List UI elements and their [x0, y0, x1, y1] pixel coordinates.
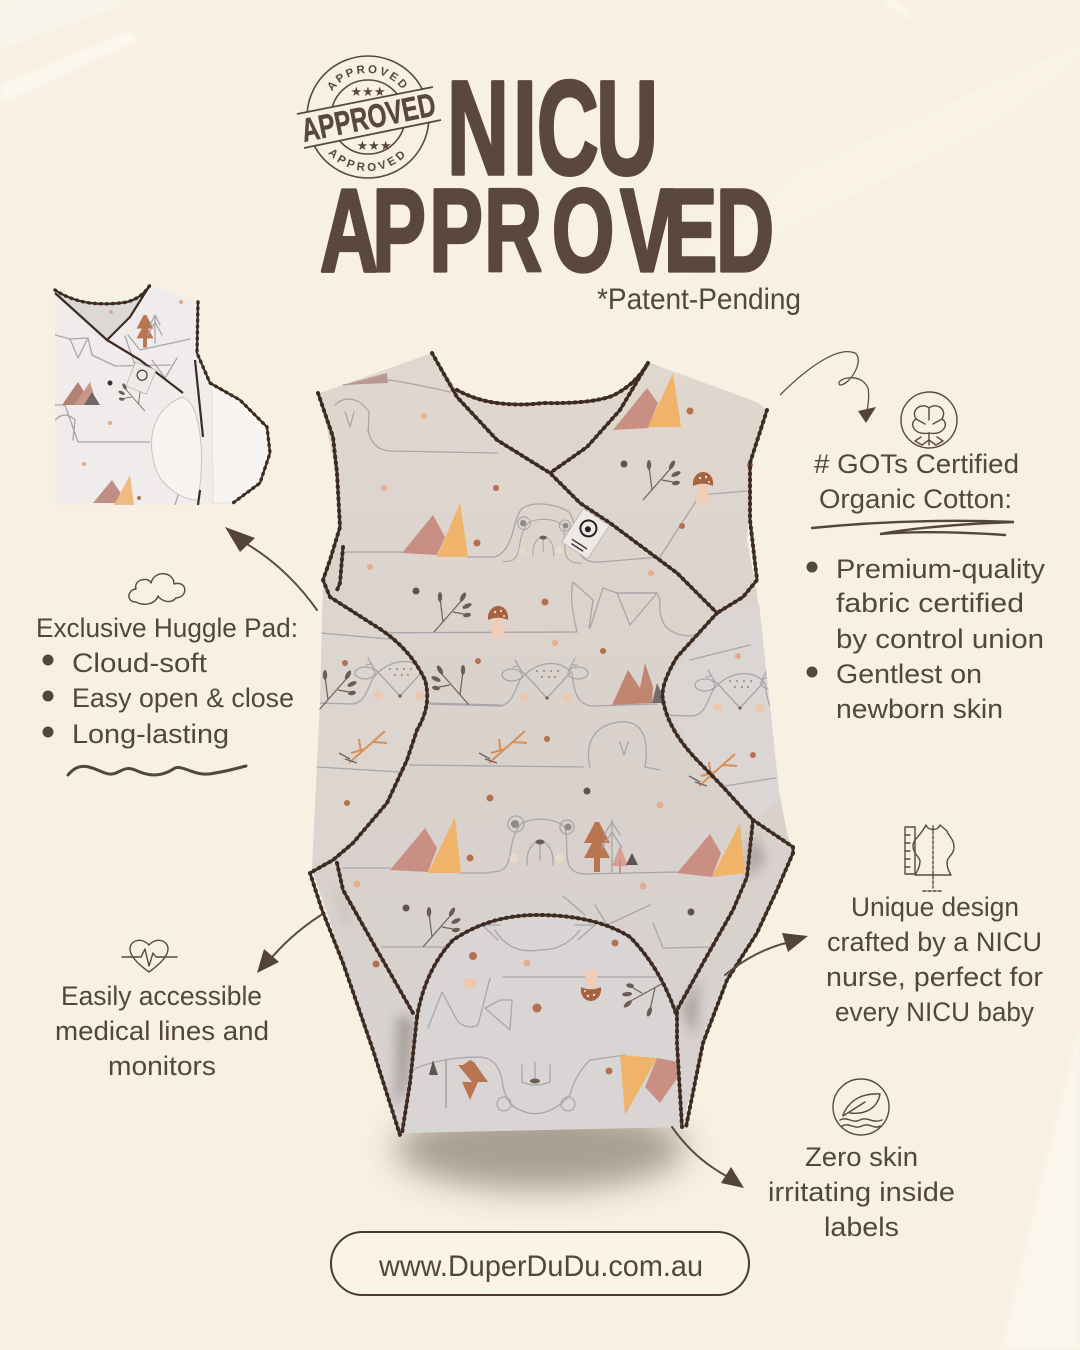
icon: cloud	[129, 574, 185, 604]
list	[806, 554, 1046, 724]
panel: medical lines: medical lines and	[55, 1016, 269, 1046]
unique design body: crafted by a NICU	[827, 927, 1042, 957]
print dots	[342, 408, 753, 1074]
arrow: medical lines	[257, 915, 321, 973]
arrow: curly to cotton	[780, 352, 876, 423]
list	[42, 648, 294, 749]
heading: Exclusive Huggle Pad:	[36, 613, 298, 643]
garment shadow	[395, 1106, 685, 1190]
list: Easy open & close	[72, 683, 294, 713]
list: Gentlest on	[836, 659, 982, 689]
creases	[335, 830, 765, 1110]
panel: zero skin irritating	[768, 1142, 955, 1242]
list: newborn skin	[836, 694, 1003, 724]
squiggle underline	[68, 766, 246, 775]
unique design body: every NICU baby	[835, 997, 1034, 1027]
picot trim	[310, 353, 793, 1135]
approved stamp: ★★★	[357, 139, 391, 154]
approved stamp: APPROVED	[328, 65, 406, 92]
left wing	[314, 632, 425, 834]
unique design body: nurse, perfect for	[826, 962, 1043, 992]
approved stamp	[296, 55, 442, 179]
heading: # GOTs Certified	[814, 449, 1019, 479]
fabric body	[312, 353, 793, 1133]
arrow: inset to garment	[225, 527, 317, 610]
website pill	[331, 1232, 749, 1295]
patent note: *Patent-Pending	[597, 283, 801, 316]
website pill: www.DuperDuDu.com.au	[378, 1250, 703, 1283]
garment: baby wrap	[308, 351, 795, 1137]
approved stamp: APPROVED	[298, 85, 439, 149]
panel: zero skin irritating: irritating inside	[768, 1177, 955, 1207]
panel: medical lines: Easily accessible	[61, 981, 262, 1011]
panel: unique design: Unique design	[851, 892, 1019, 922]
sprigs, trees and mushrooms	[339, 460, 737, 947]
panel: exclusive huggle pad	[36, 613, 298, 775]
panel: medical lines: monitors	[108, 1051, 216, 1081]
panel: GOTS certified	[806, 449, 1046, 724]
panel: medical lines	[55, 981, 269, 1081]
mountains	[343, 373, 745, 877]
panel: zero skin irritating: labels	[824, 1212, 899, 1242]
icon: feather	[833, 1079, 889, 1135]
approved stamp: ★★★	[351, 85, 385, 100]
sewn label	[562, 509, 609, 559]
arrow: labels	[672, 1127, 744, 1188]
panel: GOTS certified: Organic Cotton:	[819, 484, 1012, 514]
title: NICU	[447, 53, 658, 203]
unique design body	[826, 927, 1043, 1027]
list: Premium-quality	[836, 554, 1046, 584]
icon: dress form	[905, 825, 954, 891]
inset: huggle pad close-up	[50, 280, 275, 510]
huggle pad flap	[409, 924, 678, 1133]
icon: heart monitor	[122, 940, 177, 972]
list: Cloud-soft	[72, 648, 208, 678]
center pattern	[323, 380, 747, 948]
icon: cotton	[901, 392, 957, 448]
panel: zero skin irritating: Zero skin	[805, 1142, 918, 1172]
approved stamp: APPROVED	[328, 150, 404, 171]
list: fabric certified	[836, 588, 1024, 618]
title: APPROVED	[320, 166, 774, 297]
list: Long-lasting	[72, 719, 229, 749]
list: by control union	[836, 624, 1044, 654]
right wing	[664, 604, 779, 796]
title	[320, 53, 774, 297]
arrow: unique design	[725, 933, 808, 975]
